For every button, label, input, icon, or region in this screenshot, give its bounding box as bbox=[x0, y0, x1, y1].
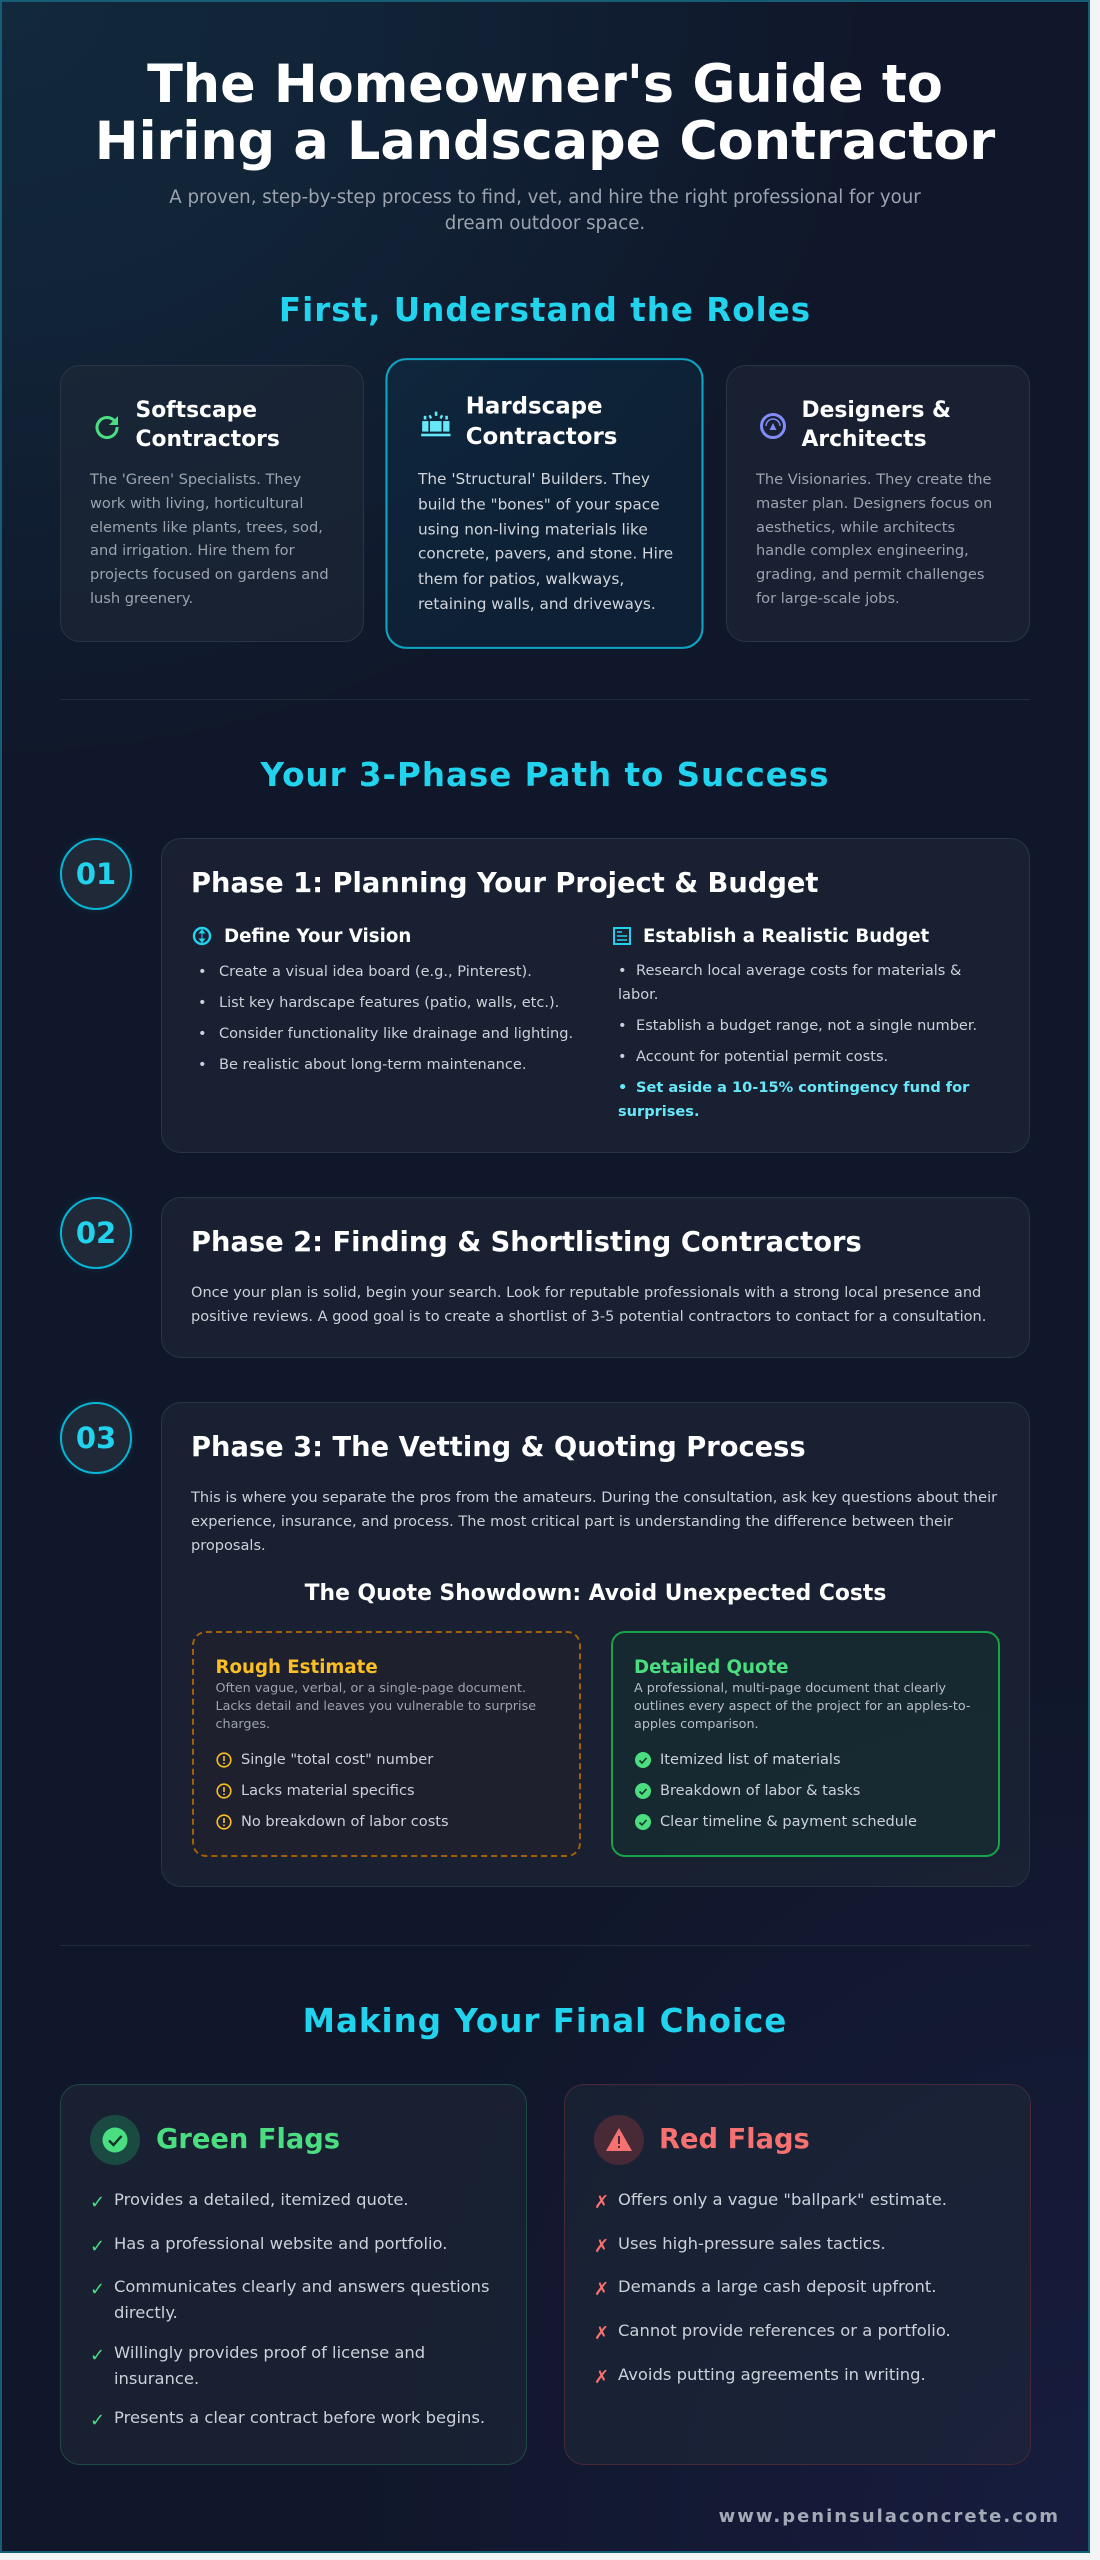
text: softscape description: elements like plants, trees, sod, bbox=[90, 519, 323, 536]
list: red flags: Avoids putting agreements in writing. bbox=[618, 2365, 926, 2384]
list: budget: Research local average costs for materials & bbox=[636, 962, 961, 979]
text: softscape description: and irrigation. Hire them for bbox=[90, 542, 295, 559]
title: Hiring a Landscape Contractor bbox=[95, 111, 995, 172]
list: green flags: Provides a detailed, itemized quote. bbox=[114, 2190, 409, 2209]
panel: detailed quote bbox=[611, 1631, 1000, 1857]
text: designers description: handle complex engineering, bbox=[756, 542, 969, 559]
list: green flags: Communicates clearly and answers questions bbox=[114, 2277, 490, 2296]
heading: designers: Designers & bbox=[802, 398, 951, 423]
text: designers description: grading, and permit challenges bbox=[756, 566, 984, 583]
list: red flags: ✗ bbox=[594, 2279, 609, 2300]
list: rough estimate items: Lacks material specifics bbox=[241, 1782, 415, 1799]
list: red flags: Uses high-pressure sales tactics. bbox=[618, 2234, 886, 2253]
text: phase 2 body: Once your plan is solid, begin your search. Look for reputable professionals with a strong local presence and bbox=[191, 1284, 981, 1301]
panel: hardscape contractors bbox=[386, 358, 704, 649]
heading: detailed quote: Detailed Quote bbox=[634, 1657, 788, 1678]
subtitle: A proven, step-by-step process to find, vet, and hire the right professional for your bbox=[169, 187, 921, 208]
list: vision bbox=[198, 963, 573, 1073]
text: softscape description: work with living, horticultural bbox=[90, 495, 303, 512]
list: green flags: ✓ bbox=[90, 2236, 105, 2257]
list: green flags bbox=[90, 2190, 490, 2431]
subheading: define your vision: Define Your Vision bbox=[224, 926, 411, 946]
list: vision: • bbox=[198, 1056, 207, 1073]
list: green flags: ✓ bbox=[90, 2410, 105, 2431]
list: vision: • bbox=[198, 994, 207, 1011]
text: hardscape description: The 'Structural' Builders. They bbox=[418, 470, 650, 488]
list: green flags: Has a professional website and portfolio. bbox=[114, 2234, 447, 2253]
text: designers description: The Visionaries. They create the bbox=[756, 471, 992, 488]
list: vision: List key hardscape features (patio, walls, etc.). bbox=[219, 994, 559, 1011]
heading: hardscape: Hardscape bbox=[466, 394, 603, 420]
heading: softscape: Softscape bbox=[136, 398, 257, 423]
list: vision: • bbox=[198, 963, 207, 980]
list: green flags: Presents a clear contract before work begins. bbox=[114, 2408, 485, 2427]
icon: compass dial bbox=[760, 413, 786, 439]
list: green flags: insurance. bbox=[114, 2368, 199, 2388]
phase number 01: 01 bbox=[76, 857, 116, 891]
list: budget: • bbox=[618, 1079, 627, 1096]
icon: vision bbox=[192, 926, 212, 946]
heading: making your final choice: Making Your Final Choice bbox=[303, 2002, 787, 2040]
panel: phase 2 bbox=[161, 1197, 1030, 1358]
heading: quote showdown: The Quote Showdown: Avoid Unexpected Costs bbox=[305, 1581, 886, 1606]
list: green flags: ✓ bbox=[90, 2279, 105, 2300]
list: detailed quote items: Breakdown of labor & tasks bbox=[660, 1782, 860, 1799]
heading: 3-phase path: Your 3-Phase Path to Success bbox=[261, 756, 829, 794]
heading: phase 2: Phase 2: Finding & Shortlisting Contractors bbox=[191, 1227, 862, 1258]
title: The Homeowner's Guide to bbox=[147, 54, 943, 115]
text: softscape description: The 'Green' Specialists. They bbox=[90, 471, 301, 488]
panel: softscape contractors bbox=[60, 365, 364, 642]
list: red flags: Demands a large cash deposit upfront. bbox=[618, 2277, 936, 2296]
icon: budget bbox=[613, 927, 631, 945]
text: hardscape description bbox=[418, 470, 674, 613]
list: vision: • bbox=[198, 1025, 207, 1042]
heading: softscape: Contractors bbox=[136, 427, 280, 452]
text: designers description: aesthetics, while architects bbox=[756, 519, 955, 536]
subtitle: dream outdoor space. bbox=[445, 213, 645, 234]
heading: hardscape bbox=[466, 394, 618, 450]
list: budget: • bbox=[618, 1017, 627, 1034]
panel: green flags bbox=[60, 2084, 527, 2465]
text: phase 3 body: This is where you separate the pros from the amateurs. During the consultation, ask key questions about their bbox=[191, 1489, 997, 1506]
heading: softscape bbox=[136, 398, 280, 452]
list: rough estimate items bbox=[216, 1751, 449, 1830]
heading: phase 3: Phase 3: The Vetting & Quoting Process bbox=[191, 1432, 806, 1463]
list: vision: Consider functionality like drainage and lighting. bbox=[219, 1025, 573, 1042]
list: budget: • bbox=[618, 962, 627, 979]
list: budget bbox=[618, 962, 977, 1120]
text: detailed quote description: outlines every aspect of the project for an apples-to- bbox=[634, 1699, 971, 1714]
list: rough estimate items: Single "total cost" number bbox=[241, 1751, 433, 1768]
list: green flags: ✓ bbox=[90, 2192, 105, 2213]
list: green flags: Willingly provides proof of license and bbox=[114, 2343, 425, 2362]
text: rough estimate description: Often vague, verbal, or a single-page document. bbox=[216, 1681, 526, 1696]
text: detailed quote description bbox=[634, 1681, 971, 1732]
list: detailed quote items: Clear timeline & payment schedule bbox=[660, 1813, 917, 1830]
heading: red flags: Red Flags bbox=[659, 2124, 810, 2155]
text: rough estimate description: charges. bbox=[216, 1717, 270, 1732]
list: budget: surprises. bbox=[618, 1103, 699, 1120]
text: rough estimate description: Lacks detail and leaves you vulnerable to surprise bbox=[216, 1699, 536, 1714]
list: red flags: ✗ bbox=[594, 2236, 609, 2257]
list: detailed quote items bbox=[635, 1751, 917, 1830]
heading: hardscape: Contractors bbox=[466, 424, 618, 450]
list: red flags: Cannot provide references or a portfolio. bbox=[618, 2321, 951, 2340]
list: red flags: Offers only a vague "ballpark" estimate. bbox=[618, 2190, 947, 2209]
text: softscape description: projects focused on gardens and bbox=[90, 566, 329, 583]
panel: rough estimate bbox=[192, 1631, 581, 1857]
heading: rough estimate: Rough Estimate bbox=[216, 1657, 378, 1678]
text: rough estimate description bbox=[216, 1681, 536, 1732]
text: hardscape description: retaining walls, and driveways. bbox=[418, 595, 656, 613]
list: green flags: directly. bbox=[114, 2302, 178, 2322]
list: budget: labor. bbox=[618, 986, 658, 1003]
icon: refresh bbox=[95, 416, 118, 440]
heading: first understand the roles: First, Understand the Roles bbox=[279, 291, 811, 329]
heading: designers bbox=[802, 398, 951, 452]
text: detailed quote description: A professional, multi-page document that clearly bbox=[634, 1681, 946, 1696]
text: hardscape description: concrete, pavers, and stone. Hire bbox=[418, 545, 674, 563]
subheading: realistic budget: Establish a Realistic Budget bbox=[643, 926, 929, 946]
list: rough estimate items: No breakdown of labor costs bbox=[241, 1813, 449, 1830]
list: green flags: ✓ bbox=[90, 2345, 105, 2366]
text: softscape description bbox=[90, 471, 329, 607]
list: budget: • bbox=[618, 1048, 627, 1065]
icon: red warning badge bbox=[594, 2115, 644, 2165]
list: budget: Set aside a 10-15% contingency fund for bbox=[636, 1079, 969, 1096]
text: hardscape description: build the "bones" of your space bbox=[418, 495, 660, 513]
list: red flags: ✗ bbox=[594, 2323, 609, 2344]
text: designers description: master plan. Designers focus on bbox=[756, 495, 992, 512]
text: detailed quote description: apples comparison. bbox=[634, 1717, 759, 1732]
phase number 02 bbox=[60, 1197, 132, 1269]
phase number 03 bbox=[60, 1402, 132, 1474]
title bbox=[95, 54, 996, 172]
heading: phase 1: Phase 1: Planning Your Project & Budget bbox=[191, 868, 818, 899]
footer url: www.peninsulaconcrete.com bbox=[719, 2506, 1060, 2527]
icon: hardscape blocks bbox=[421, 412, 450, 436]
panel: phase 3 bbox=[161, 1402, 1030, 1887]
text: hardscape description: them for patios, walkways, bbox=[418, 570, 625, 588]
list: red flags: ✗ bbox=[594, 2192, 609, 2213]
text: designers description: for large-scale jobs. bbox=[756, 590, 900, 607]
list: vision: Be realistic about long-term maintenance. bbox=[219, 1056, 526, 1073]
icon: green check badge bbox=[90, 2115, 140, 2165]
phase number 01 bbox=[60, 838, 132, 910]
text: hardscape description: using non-living materials like bbox=[418, 520, 648, 538]
panel: designers and architects bbox=[726, 365, 1030, 642]
subtitle bbox=[169, 187, 921, 234]
list: budget: Account for potential permit costs. bbox=[636, 1048, 888, 1065]
panel: phase 1 bbox=[161, 838, 1030, 1153]
list: detailed quote items: Itemized list of materials bbox=[660, 1751, 841, 1768]
heading: green flags: Green Flags bbox=[156, 2124, 340, 2155]
list: vision: Create a visual idea board (e.g., Pinterest). bbox=[219, 963, 532, 980]
text: phase 2 body bbox=[191, 1284, 986, 1325]
list: red flags: ✗ bbox=[594, 2367, 609, 2388]
list: budget: Establish a budget range, not a single number. bbox=[636, 1017, 977, 1034]
text: softscape description: lush greenery. bbox=[90, 590, 193, 607]
text: phase 2 body: positive reviews. A good goal is to create a shortlist of 3-5 potential contractors to contact for a consultation. bbox=[191, 1308, 986, 1325]
heading: designers: Architects bbox=[802, 427, 927, 452]
phase number 03: 03 bbox=[76, 1421, 116, 1455]
text: phase 3 body bbox=[190, 1489, 998, 1554]
panel: red flags bbox=[564, 2084, 1031, 2465]
text: designers description bbox=[756, 471, 992, 607]
phase number 02: 02 bbox=[76, 1216, 116, 1250]
list: red flags bbox=[594, 2190, 951, 2388]
text: phase 3 body: proposals. bbox=[191, 1537, 266, 1554]
text: phase 3 body: experience, insurance, and process. The most critical part is understanding the difference between their bbox=[191, 1513, 953, 1530]
